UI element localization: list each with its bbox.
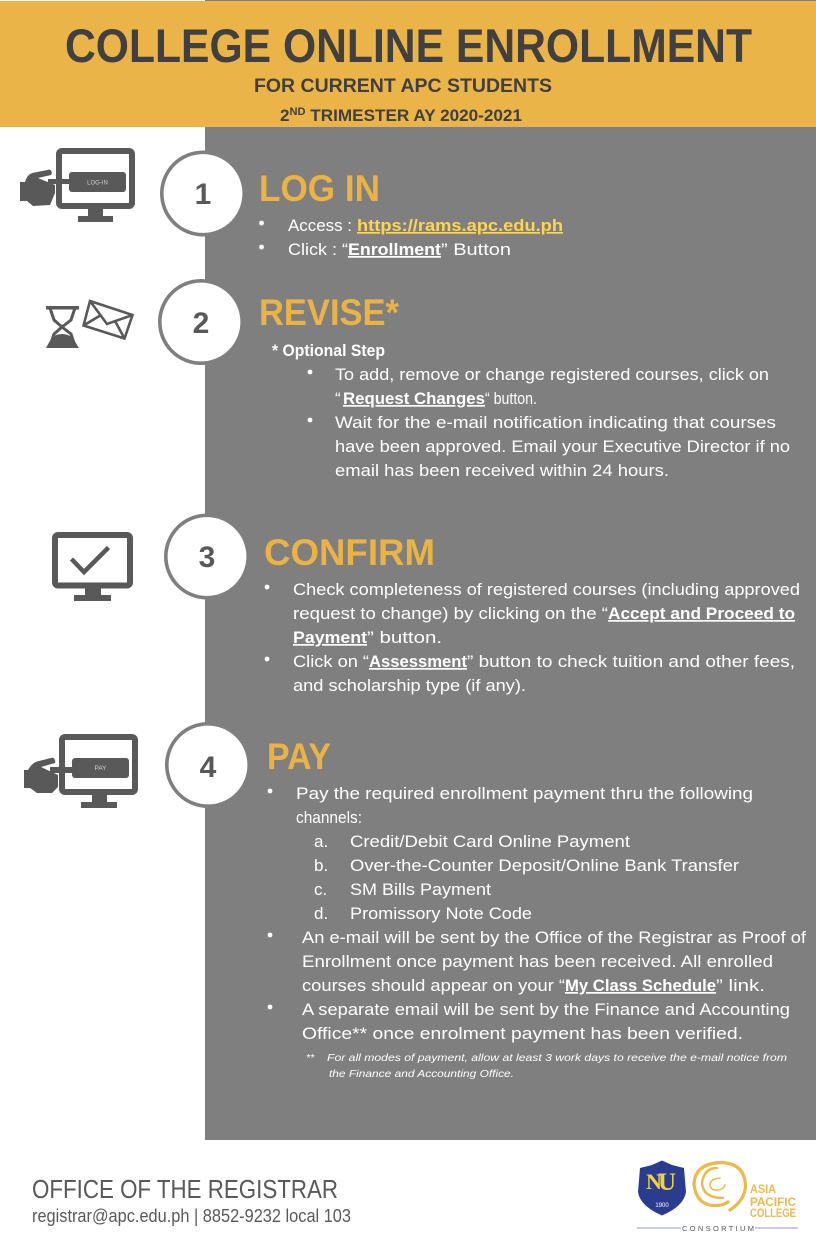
step 3 bullets: Accept and Proceed to [608, 604, 795, 623]
step 2 icon: hourglass and envelope [46, 301, 132, 348]
step 4 proof of enrollment: My Class Schedule [565, 976, 716, 995]
step 4 proof of enrollment [268, 928, 806, 995]
footnote: the Finance and Accounting Office. [329, 1068, 514, 1080]
title: COLLEGE ONLINE ENROLLMENT [65, 19, 752, 72]
step 1 bullets: ” Button [441, 240, 511, 259]
step 2 bullets: “ [335, 389, 341, 408]
step 4 payment channels: d. [314, 904, 328, 923]
step 3 bullets: Assessment [369, 652, 467, 671]
footer office of the registrar [32, 1174, 351, 1226]
step 1 bullets: Click : “ [288, 240, 348, 259]
APC spiral logo [694, 1162, 746, 1210]
NU shield logo [638, 1160, 686, 1216]
step 4 text [267, 736, 806, 1080]
step 2 number circle: 2 [193, 307, 209, 340]
step 1 bullets: Access : [288, 216, 352, 235]
header banner [0, 1, 816, 127]
step 4 payment channels: a. [314, 832, 328, 851]
step 2 heading: REVISE* [259, 292, 400, 333]
step 3 icon: monitor with check [55, 535, 130, 601]
step 4 number circle [167, 724, 249, 806]
step 1 icon: hand on log-in monitor: LOG-IN [87, 180, 108, 186]
step 4 payment channels: c. [314, 880, 327, 899]
subtitle: FOR CURRENT APC STUDENTS [254, 76, 552, 97]
step 4 icon: hand on pay monitor: PAY [94, 765, 107, 772]
step 4 payment channels: Credit/Debit Card Online Payment [350, 832, 630, 851]
footer office of the registrar: OFFICE OF THE REGISTRAR [32, 1174, 338, 1204]
step 4 proof of enrollment: Enrollment once payment has been received. All enrolled [302, 952, 773, 971]
step 3 bullets [265, 580, 800, 695]
step 3 bullets: and scholarship type (if any). [293, 676, 526, 695]
step 1 number circle [162, 152, 244, 235]
trimester: 2 [280, 106, 289, 125]
step 4 payment channels: Pay the required enrollment payment thru the following [296, 784, 753, 803]
gray content panel [205, 0, 816, 1140]
step 1 bullets [259, 216, 563, 259]
step 4 payment channels: b. [314, 856, 328, 875]
step 3 bullets: request to change) by clicking on the “ [293, 604, 608, 623]
footer office of the registrar: registrar@apc.edu.ph | 8852-9232 local 103 [32, 1206, 351, 1226]
step 3 number circle: 3 [199, 541, 215, 574]
APC wordmark: PACIFIC [750, 1197, 796, 1209]
step 1 text [259, 168, 563, 259]
step 4 finance email [268, 1000, 790, 1043]
step 4 finance email: Office** once enrolment payment has been verified. [302, 1024, 743, 1043]
step 4 finance email: A separate email will be sent by the Finance and Accounting [302, 1000, 790, 1019]
step 2 bullets: To add, remove or change registered courses, click on [335, 365, 769, 384]
step 3 bullets: ” button to check tuition and other fees, [467, 652, 795, 671]
step 4 payment channels: Over-the-Counter Deposit/Online Bank Transfer [350, 856, 739, 875]
APC wordmark [750, 1184, 796, 1220]
optional step label: * Optional Step [272, 341, 385, 360]
step 2 text [259, 292, 790, 480]
step 4 icon: hand on pay monitor [24, 737, 135, 808]
step 2 bullets: have been approved. Email your Executive Director if no [335, 437, 790, 456]
consortium line: CONSORTIUM [682, 1224, 754, 1233]
step 2 bullets: Request Changes [343, 389, 485, 408]
NU shield logo: N [646, 1169, 662, 1194]
footnote: ** [306, 1052, 315, 1064]
step 2 bullets: “ button. [485, 389, 537, 408]
step 2 bullets: email has been received within 24 hours. [335, 461, 669, 480]
trimester: TRIMESTER AY 2020-2021 [306, 106, 522, 125]
step 1 bullets: Enrollment [348, 240, 441, 259]
step 3 bullets: Check completeness of registered courses (including approved [293, 580, 800, 599]
step 1 bullets: https://rams.apc.edu.ph [357, 216, 563, 235]
step 3 number circle [166, 515, 248, 598]
step 4 heading: PAY [267, 736, 331, 777]
logos [637, 1160, 798, 1233]
step 3 text [264, 532, 800, 695]
step 4 proof of enrollment: An e-mail will be sent by the Office of the Registrar as Proof of [302, 928, 806, 947]
step 2 bullets [308, 365, 790, 480]
step 1 number circle: 1 [195, 178, 211, 211]
APC wordmark: COLLEGE [750, 1208, 796, 1220]
step 4 payment channels: channels: [296, 808, 362, 827]
step 3 heading: CONFIRM [264, 532, 435, 573]
NU shield logo: 1900 [655, 1203, 669, 1209]
step 4 payment channels: Promissory Note Code [350, 904, 532, 923]
step 3 bullets: ” button. [367, 628, 442, 647]
footnote: For all modes of payment, allow at least 3 work days to receive the e-mail notice from [327, 1052, 787, 1064]
step 1 icon: hand on log-in monitor [20, 151, 132, 222]
step 1 heading: LOG IN [259, 168, 380, 209]
step 4 proof of enrollment: ” link. [716, 976, 765, 995]
step 4 proof of enrollment: courses should appear on your “ [302, 976, 565, 995]
trimester: ND [290, 106, 306, 118]
step 3 bullets: Click on “ [293, 652, 369, 671]
step 3 bullets: Payment [293, 628, 367, 647]
APC wordmark: ASIA [750, 1184, 776, 1196]
step 2 number circle [160, 281, 242, 363]
step 2 bullets: Wait for the e-mail notification indicating that courses [335, 413, 776, 432]
step 4 payment channels: SM Bills Payment [350, 880, 491, 899]
step 4 payment channels [268, 784, 753, 923]
NU shield logo: U [658, 1169, 676, 1196]
step 4 number circle: 4 [200, 751, 217, 784]
footnote [306, 1052, 787, 1080]
